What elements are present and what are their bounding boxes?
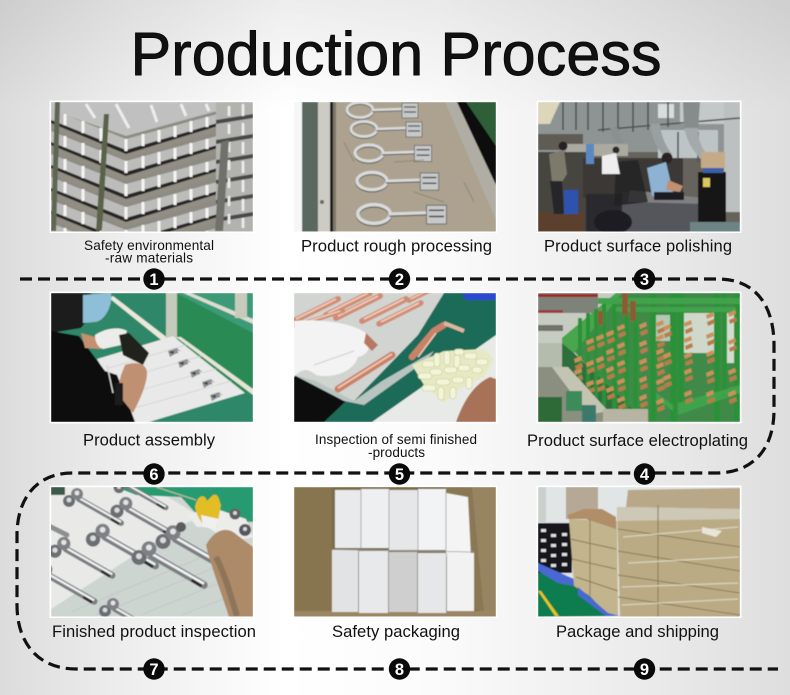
photo frame 5 (292, 292, 498, 424)
caption line block 1: -raw materials (105, 250, 193, 266)
title: Production Process (130, 20, 662, 88)
caption 2: Product rough processing (301, 237, 492, 256)
caption lines 5: Inspection of semi finished (315, 432, 477, 447)
caption 3: Product surface polishing (544, 238, 732, 256)
step badge 9: 9 (640, 661, 649, 679)
panel: step 1 raw materials (50, 100, 254, 273)
panel: step 7 finished inspection (30, 476, 256, 641)
photo frame 2 (292, 100, 498, 233)
photo: worker assembling parts with a drill (51, 293, 253, 422)
photo: polishing workshop with workers (538, 102, 740, 232)
step badge 3: 3 (640, 271, 649, 289)
panel: step 5 semi-finished inspection (292, 283, 498, 460)
arrow: dashed process path winding through all steps (17, 279, 778, 669)
photo: chrome rollers and gloved hand (51, 487, 253, 616)
panel: step 9 shipping (536, 486, 742, 641)
panel: step 2 rough processing (292, 100, 498, 256)
photo frame 3 (536, 100, 742, 233)
photo frame 9 (536, 486, 742, 618)
step badge 2 (389, 268, 410, 290)
photo: white boxes in a carton (294, 487, 496, 616)
step badge 8: 8 (395, 661, 404, 679)
photo frame 4 (536, 292, 742, 424)
step badge 2: 2 (395, 271, 404, 289)
step badge 9 (634, 658, 655, 680)
panel: step 6 assembly (50, 292, 254, 450)
panel: step 4 electroplating (527, 292, 748, 450)
step badge 5 (389, 463, 410, 485)
photo frame 1 (50, 100, 254, 233)
step badge 1: 1 (149, 271, 159, 289)
caption line block 1: Safety environmental (84, 238, 214, 253)
caption 4: Product surface electroplating (527, 431, 748, 450)
photo: stacked aluminium ingots (51, 102, 253, 232)
step badge 4 (634, 463, 655, 485)
step badge 8 (389, 658, 410, 680)
caption lines 5: -products (368, 445, 425, 460)
photo frame 6 (50, 292, 254, 424)
step badge 4: 4 (640, 466, 650, 484)
photo: wrapped cartons on pallets (538, 487, 740, 616)
caption line block 1 (84, 238, 214, 266)
step badge 1 (143, 268, 165, 290)
step badge 6 (143, 463, 165, 485)
caption 9: Package and shipping (556, 622, 719, 641)
caption lines 5 (315, 432, 477, 460)
step badge 3 (634, 268, 655, 290)
photo frame 7 (50, 486, 254, 618)
step badge 5: 5 (395, 466, 404, 484)
caption 6: Product assembly (83, 431, 216, 450)
step badge 7 (143, 658, 165, 680)
photo: gloved hand inspecting rose gold handles (294, 293, 496, 422)
photo: green electroplating line with copper parts (538, 293, 740, 422)
photo frame 8 (292, 486, 498, 618)
panel: step 3 surface polishing (536, 100, 742, 256)
step badge 7: 7 (149, 661, 159, 679)
caption 7: Finished product inspection (52, 622, 256, 641)
panel: step 8 packaging (292, 486, 498, 641)
step badge 6: 6 (149, 466, 159, 484)
caption 8: Safety packaging (332, 622, 460, 641)
photo: rough cast parts on a concrete bench (294, 102, 496, 232)
